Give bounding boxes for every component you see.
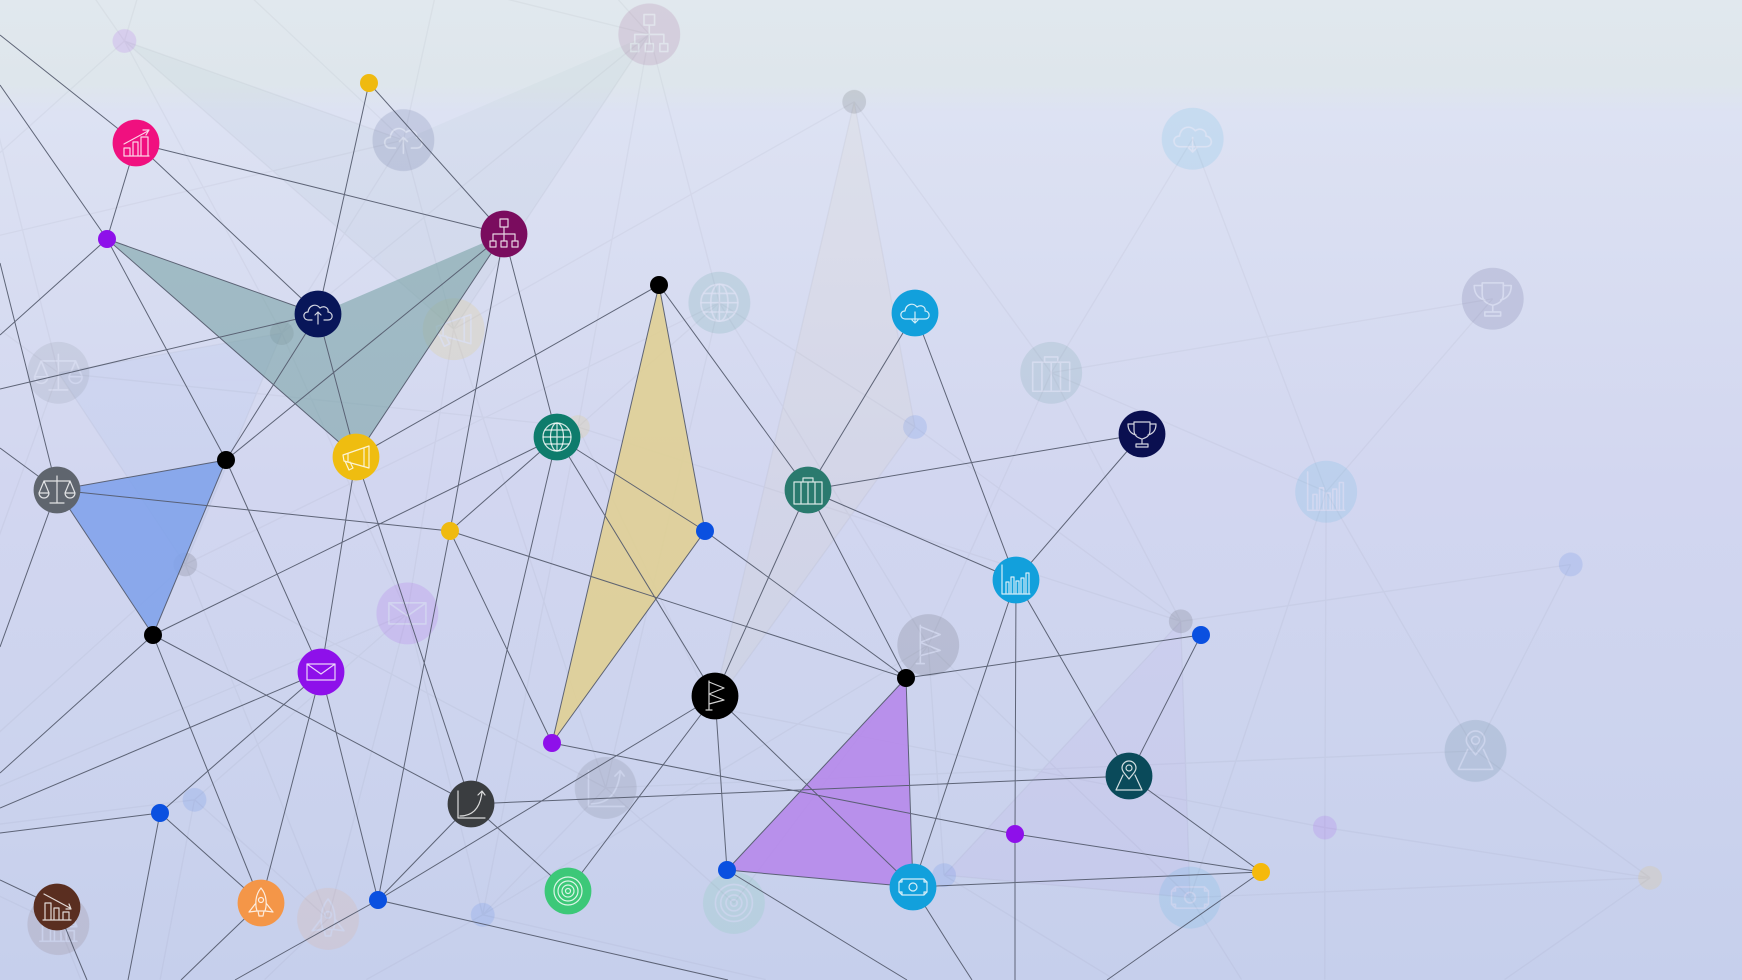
- node: blue banknote: [890, 864, 936, 910]
- node: blue cloud download: [892, 290, 938, 336]
- node: yellow dot: [360, 74, 378, 92]
- node: grey scales: [34, 467, 80, 513]
- node: dark grey rising chart: [448, 781, 494, 827]
- node: black flag: [692, 673, 738, 719]
- faded polygons: [58, 34, 1190, 898]
- node: navy trophy: [1119, 411, 1165, 457]
- node: yellow dot centre: [441, 522, 459, 540]
- node: purple dot right: [1006, 825, 1024, 843]
- node: blue dot bottom: [369, 891, 387, 909]
- node: green globe: [534, 414, 580, 460]
- node: yellow megaphone: [333, 434, 379, 480]
- node: pink growth chart: [113, 120, 159, 166]
- node: blue dot far right: [1192, 626, 1210, 644]
- panel: blue triangle: [57, 460, 226, 635]
- node: teal briefcase: [785, 467, 831, 513]
- node: orange rocket: [238, 880, 284, 926]
- node: green target: [545, 868, 591, 914]
- node: purple mail: [298, 649, 344, 695]
- node: brown falling chart: [34, 884, 80, 930]
- foreground network: [0, 35, 1270, 980]
- node: blue dot purple triangle: [718, 861, 736, 879]
- node: purple dot centre: [543, 734, 561, 752]
- node: blue dot lower left: [151, 804, 169, 822]
- node: black dot top: [650, 276, 668, 294]
- foreground polygons: [57, 234, 913, 887]
- node: black dot right: [897, 669, 915, 687]
- node: blue bar chart: [993, 557, 1039, 603]
- line extensions to the bottom edge: [74, 949, 1151, 980]
- node: blue dot yellow polygon: [696, 522, 714, 540]
- node: purple dot: [98, 230, 116, 248]
- node: dark teal map pin: [1106, 753, 1152, 799]
- foreground nodes: [34, 74, 1270, 930]
- node: maroon organisation chart: [481, 211, 527, 257]
- panel: teal polygon: [107, 234, 504, 457]
- panel: purple triangle: [727, 678, 913, 887]
- connecting lines: [0, 35, 1261, 949]
- node: black dot left: [144, 626, 162, 644]
- node: black dot upper left: [217, 451, 235, 469]
- node: yellow dot far right: [1252, 863, 1270, 881]
- node: navy cloud upload: [295, 291, 341, 337]
- panel: yellow polygon: [552, 285, 705, 743]
